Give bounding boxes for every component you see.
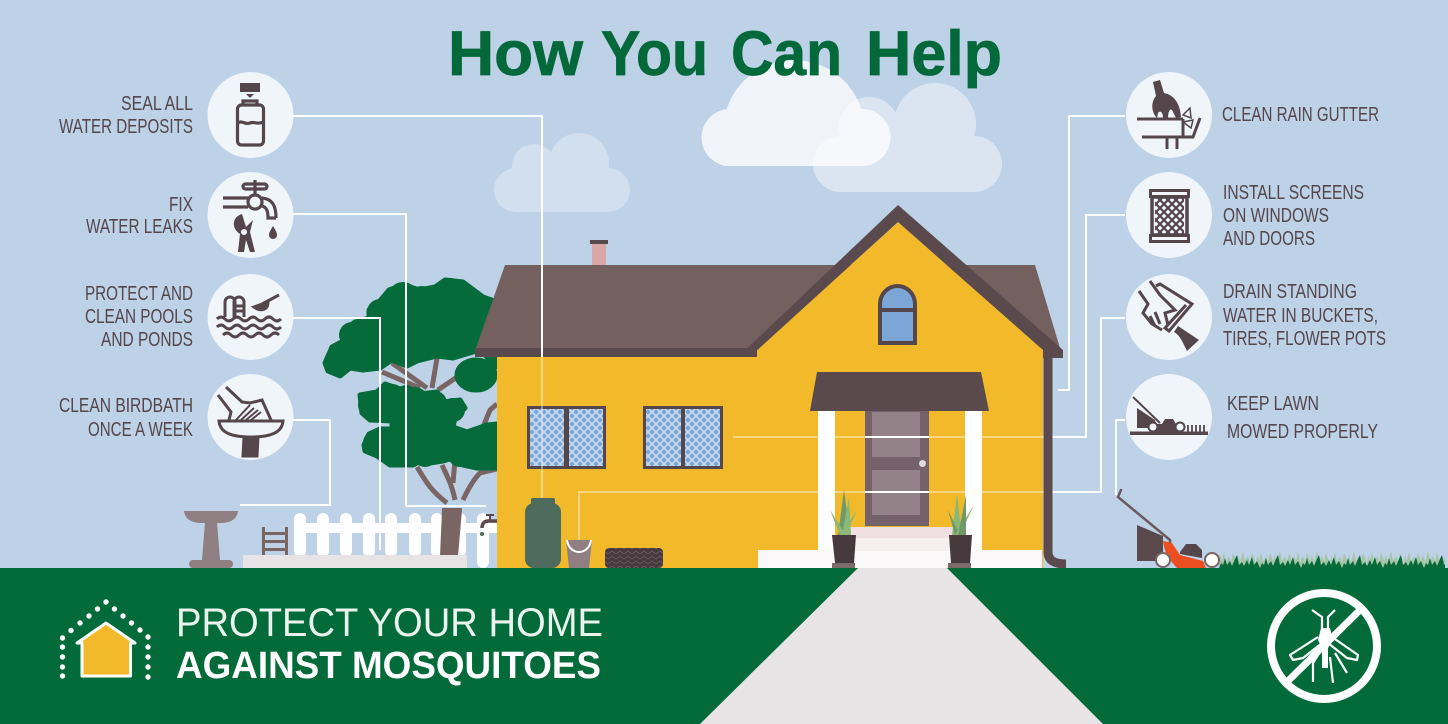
line: seal water deposits [293, 116, 542, 498]
icon: tap and pliers [223, 180, 277, 252]
icon: sealed bottle [238, 83, 264, 145]
icon: hand tipping bucket [1139, 281, 1199, 351]
item: clean rain gutter [1126, 72, 1379, 158]
cloud: right back [813, 83, 1002, 192]
back roof [476, 265, 1060, 348]
title: Can [731, 19, 842, 89]
gable [752, 222, 1043, 400]
line: mow lawn [1116, 420, 1125, 495]
bird bath [184, 511, 238, 568]
no mosquito icon [1271, 593, 1377, 699]
line: clean birdbath [240, 420, 330, 505]
item: seal all water deposits: WATER DEPOSITS [59, 116, 193, 138]
item: keep lawn mowed: KEEP LAWN [1227, 393, 1319, 415]
item: clean birdbath [59, 374, 294, 460]
item: install screens [1126, 172, 1364, 258]
item: install screens: INSTALL SCREENS [1223, 182, 1364, 204]
chimney [590, 240, 608, 265]
item: drain standing water [1126, 274, 1386, 360]
item: drain standing water: TIRES, FLOWER POTS [1223, 328, 1386, 350]
porch base and steps [758, 527, 1042, 568]
footer headline: AGAINST MOSQUITOES [176, 645, 601, 687]
line: install screens [733, 215, 1125, 437]
icon: scrubbing a birdbath [218, 387, 283, 456]
item: install screens: ON WINDOWS [1223, 205, 1329, 227]
line: drain standing water [579, 318, 1125, 540]
downpipe [1048, 358, 1066, 564]
item: protect and clean pools: AND PONDS [101, 329, 193, 351]
lawn mower [1118, 490, 1219, 568]
item: seal all water deposits [59, 72, 294, 158]
icon: mower [1130, 397, 1208, 435]
icon: scoop and gutter [1137, 80, 1200, 149]
ladder [262, 527, 288, 555]
title: You [601, 19, 708, 89]
item: clean birdbath: CLEAN BIRDBATH [59, 395, 193, 417]
item: keep lawn mowed: MOWED PROPERLY [1227, 421, 1378, 443]
tire [605, 548, 663, 568]
wall [497, 357, 1043, 568]
house [475, 205, 1063, 568]
eaves [475, 348, 765, 357]
item: protect and clean pools [85, 274, 294, 360]
icon: window screen [1150, 190, 1188, 242]
item: fix water leaks: FIX [169, 194, 193, 216]
item: keep lawn mowed [1126, 374, 1378, 460]
door [865, 411, 929, 526]
item: fix water leaks [86, 172, 294, 258]
grass [1219, 550, 1445, 568]
pool deck [243, 555, 467, 568]
window left [527, 406, 606, 469]
porch roof and columns [810, 372, 989, 551]
line: protect pools [293, 318, 380, 550]
tree [324, 278, 499, 555]
logo: house with dots [60, 599, 151, 680]
footer headline [176, 601, 603, 687]
gable trim [738, 205, 1063, 358]
garden tap [480, 514, 497, 536]
item: protect and clean pools: CLEAN POOLS [85, 306, 193, 328]
cloud: small left [494, 133, 630, 212]
bucket [566, 540, 592, 568]
item: fix water leaks: WATER LEAKS [86, 216, 193, 238]
line: clean rain gutter [1058, 116, 1125, 390]
cloud: large front [702, 60, 890, 166]
water tank [525, 498, 561, 568]
front path [700, 568, 1103, 724]
icon: pool ladder and skimmer [217, 295, 281, 337]
arched window [878, 284, 917, 345]
left potted plant [830, 490, 857, 568]
window right [643, 406, 723, 469]
item: drain standing water: WATER IN BUCKETS, [1223, 305, 1378, 327]
item: drain standing water: DRAIN STANDING [1223, 281, 1357, 303]
title [448, 19, 1002, 89]
item: clean rain gutter: CLEAN RAIN GUTTER [1222, 104, 1379, 126]
leader lines [240, 116, 1125, 550]
item: install screens: AND DOORS [1223, 228, 1315, 250]
item: clean birdbath: ONCE A WEEK [88, 419, 193, 441]
footer headline: PROTECT YOUR HOME [176, 601, 603, 645]
right potted plant [948, 494, 974, 568]
trunk over fence [440, 510, 462, 556]
title: Help [866, 19, 1002, 89]
green ground [0, 568, 1448, 724]
item: protect and clean pools: PROTECT AND [85, 283, 193, 305]
item: seal all water deposits: SEAL ALL [121, 93, 193, 115]
white picket fence [294, 513, 497, 568]
line: fix water leaks [293, 214, 486, 506]
title: How [448, 19, 584, 89]
